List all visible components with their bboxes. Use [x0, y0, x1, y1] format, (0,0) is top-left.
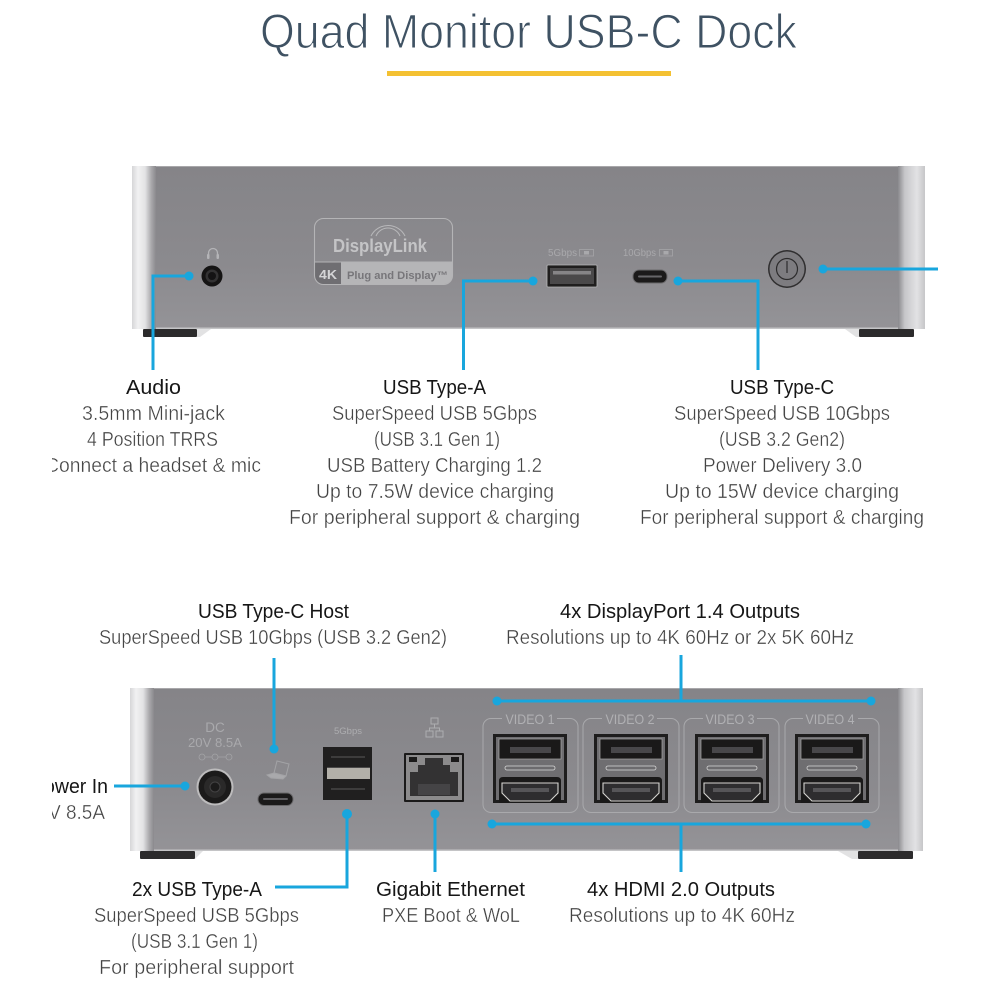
video group: VIDEO 2	[583, 711, 679, 812]
DisplayLink badge: 4K	[319, 267, 338, 282]
text block: gigabit ethernet	[376, 879, 525, 927]
text block: USB Type-C: For peripheral support & charging	[640, 507, 924, 529]
DisplayLink badge: Plug and Display™	[347, 270, 448, 282]
USB-A port label: 5Gbps	[548, 248, 577, 259]
USB-A port	[547, 265, 597, 287]
text block: power in: Power In	[31, 776, 108, 798]
callout line: gigabit ethernet	[430, 810, 440, 872]
text block: USB Type-C: (USB 3.2 Gen2)	[719, 429, 845, 451]
text block: USB Type-C Host	[99, 601, 447, 649]
panel: rear of dock	[114, 655, 923, 887]
text block: 2x USB Type-A: 2x USB Type-A	[132, 879, 263, 901]
text block: HDMI outputs: Resolutions up to 4K 60Hz	[569, 905, 795, 927]
DisplayLink badge: DisplayLink	[333, 236, 428, 256]
video group: VIDEO 1	[483, 711, 578, 812]
video group: VIDEO 2: VIDEO 2	[606, 711, 655, 727]
text block: USB Type-A	[289, 377, 580, 529]
text block: USB Type-C: Up to 15W device charging	[665, 481, 899, 503]
text block: USB Type-C Host: SuperSpeed USB 10Gbps (USB 3.2 Gen2)	[99, 627, 447, 649]
text block: USB Type-A: SuperSpeed USB 5Gbps	[332, 403, 537, 425]
stacked USB-A ports	[323, 747, 372, 800]
title: Quad Monitor USB-C Dock	[260, 6, 798, 59]
video group: VIDEO 3: VIDEO 3	[706, 711, 755, 727]
USB-A port label	[548, 248, 594, 259]
callout line: USB Type-C	[674, 276, 758, 370]
text block: 2x USB Type-A: For peripheral support	[99, 957, 294, 979]
callout line: HDMI outputs	[488, 820, 870, 872]
text block: USB Type-A: USB Battery Charging 1.2	[327, 455, 542, 477]
text block: USB Type-C: USB Type-C	[730, 377, 834, 399]
video group: VIDEO 4	[785, 711, 879, 812]
text block: audio: Connect a headset & mic	[45, 455, 261, 477]
stacked USB-A label: 5Gbps	[334, 726, 362, 737]
icon: laptop	[267, 761, 289, 779]
text block: 2x USB Type-A	[94, 879, 299, 979]
text block: gigabit ethernet: PXE Boot & WoL	[382, 905, 520, 927]
power button	[768, 250, 806, 288]
text block: 2x USB Type-A: (USB 3.1 Gen 1)	[131, 931, 258, 953]
text block: power in: 20V 8.5A	[27, 802, 106, 824]
text block: USB Type-C	[640, 377, 924, 529]
USB-C host port	[258, 793, 293, 806]
DisplayLink badge	[314, 218, 452, 284]
panel: front of dock	[132, 166, 938, 370]
RJ45 gigabit port	[404, 753, 464, 802]
video group: VIDEO 1: VIDEO 1	[506, 711, 555, 727]
text block: audio: 3.5mm Mini-jack	[82, 403, 226, 425]
text block: USB Type-C: SuperSpeed USB 10Gbps	[674, 403, 890, 425]
USB-C port	[633, 270, 667, 283]
dock feet	[140, 851, 913, 859]
dock body	[130, 688, 923, 851]
text block: USB Type-C Host: USB Type-C Host	[198, 601, 349, 623]
text block: USB Type-A: USB Type-A	[383, 377, 487, 399]
icon: network	[426, 718, 443, 737]
USB-C port label: 10Gbps	[623, 248, 656, 259]
text block: 2x USB Type-A: SuperSpeed USB 5Gbps	[94, 905, 299, 927]
DC label: 20V 8.5A	[188, 735, 242, 750]
text block: HDMI outputs	[569, 879, 795, 927]
DC power jack	[196, 768, 234, 806]
audio jack	[202, 266, 222, 286]
video group: VIDEO 3	[684, 711, 779, 812]
callout line: DisplayPort outputs	[492, 655, 876, 706]
DC label: DC	[205, 720, 225, 735]
DC label	[188, 720, 242, 760]
text block: power in	[52, 779, 107, 819]
callout line: power button	[818, 264, 938, 274]
callout line: 2x USB Type-A	[275, 809, 352, 887]
callout line: USB Type-A	[464, 276, 538, 370]
text block: HDMI outputs: 4x HDMI 2.0 Outputs	[587, 879, 775, 901]
callout line: USB-C host	[270, 658, 278, 754]
callout line: power in	[114, 782, 190, 790]
title accent bar	[387, 71, 671, 76]
text block: DisplayPort outputs: Resolutions up to 4K 60Hz or 2x 5K 60Hz	[506, 627, 854, 649]
text block: USB Type-A: (USB 3.1 Gen 1)	[374, 429, 500, 451]
text block: USB Type-C: Power Delivery 3.0	[703, 455, 862, 477]
text block: DisplayPort outputs: 4x DisplayPort 1.4 Outputs	[560, 601, 800, 623]
dock body	[132, 166, 925, 329]
text block: audio: 4 Position TRRS	[87, 429, 218, 451]
video group: VIDEO 4: VIDEO 4	[806, 711, 855, 727]
text block: gigabit ethernet: Gigabit Ethernet	[376, 879, 525, 901]
text block: audio: Audio	[126, 377, 181, 399]
text block: USB Type-A: For peripheral support & charging	[289, 507, 580, 529]
text block: audio	[52, 379, 260, 472]
text block: USB Type-A: Up to 7.5W device charging	[316, 481, 554, 503]
dock feet	[143, 329, 914, 337]
text block: DisplayPort outputs	[506, 601, 854, 649]
callout line: audio	[153, 272, 194, 370]
icon: headphones	[207, 248, 219, 259]
